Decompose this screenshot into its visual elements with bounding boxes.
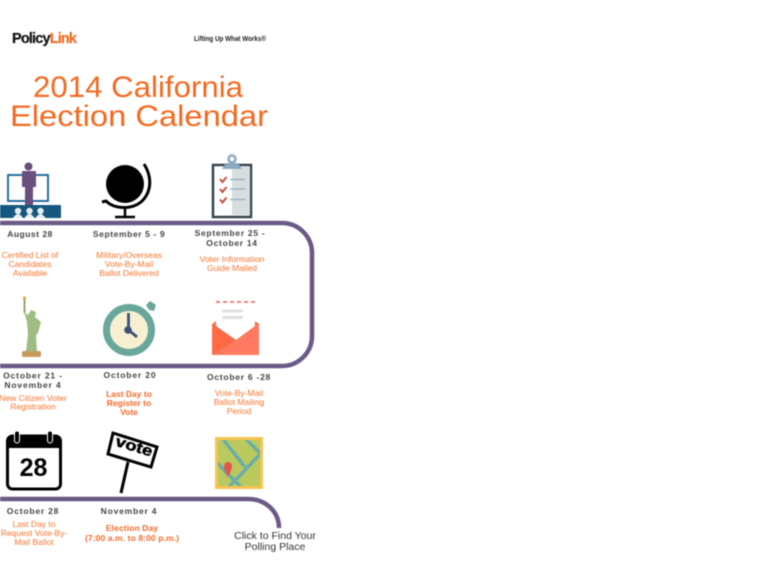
icon: vote sign bbox=[108, 433, 157, 493]
description: certified list: Candidates bbox=[8, 259, 52, 269]
description: election day: (7:00 a.m. to 8:00 p.m.) bbox=[85, 533, 179, 543]
tagline: Lifting Up What Works® bbox=[194, 35, 267, 43]
description: last day to request: Request Vote-By- bbox=[1, 528, 67, 538]
title: Election Calendar bbox=[10, 100, 268, 133]
description: ballot mailing bbox=[214, 388, 265, 416]
icon: clipboard bbox=[213, 156, 251, 217]
timeline path: lower segment bbox=[0, 499, 279, 528]
description: military overseas: Vote-By-Mail bbox=[105, 259, 153, 269]
description: new citizen: New Citizen Voter bbox=[0, 393, 67, 403]
icon: vote sign: vote bbox=[113, 433, 155, 460]
description: new citizen bbox=[0, 393, 67, 412]
date: October 21 - November 4: October 21 - bbox=[3, 370, 63, 380]
link: find your polling place: Polling Place bbox=[245, 541, 306, 553]
description: ballot mailing: Vote-By-Mail bbox=[215, 388, 263, 398]
icon: globe bbox=[102, 164, 150, 217]
description: last day to register bbox=[106, 389, 152, 417]
icon: candidates list bbox=[0, 162, 61, 218]
logo: PolicyLink: PolicyLink bbox=[12, 31, 78, 47]
description: last day to register: Last Day to bbox=[106, 389, 152, 399]
title: 2014 California bbox=[33, 71, 244, 104]
link: find your polling place: Click to Find Your bbox=[234, 530, 316, 542]
description: certified list: Available bbox=[13, 268, 47, 278]
date: September 25 - October 14: September 25 - bbox=[195, 228, 265, 238]
date: October 21 - November 4 bbox=[3, 370, 63, 390]
description: new citizen: Registration bbox=[10, 402, 56, 412]
description: ballot mailing: Ballot Mailing bbox=[214, 397, 265, 407]
description: voter guide: Guide Mailed bbox=[207, 263, 257, 273]
date: September 25 - October 14 bbox=[195, 228, 265, 248]
icon: stopwatch bbox=[106, 301, 156, 352]
description: last day to request bbox=[1, 519, 67, 547]
description: last day to request: Last Day to bbox=[12, 519, 56, 529]
date: September 25 - October 14: October 14 bbox=[206, 238, 258, 248]
date: October 6 -28: October 6 -28 bbox=[207, 372, 271, 382]
date: August 28: August 28 bbox=[7, 229, 53, 239]
description: election day bbox=[85, 523, 179, 543]
date: October 21 - November 4: November 4 bbox=[4, 380, 62, 390]
date: October 28: October 28 bbox=[7, 506, 59, 516]
description: military overseas: Ballot Delivered bbox=[99, 268, 159, 278]
description: last day to register: Register to bbox=[107, 398, 151, 408]
icon: map bbox=[216, 438, 264, 488]
description: last day to request: Mail Ballot bbox=[14, 537, 54, 547]
date: October 20: October 20 bbox=[104, 370, 156, 380]
description: military overseas bbox=[96, 250, 162, 278]
description: military overseas: Military/Overseas bbox=[96, 250, 162, 260]
description: voter guide: Voter Information bbox=[200, 254, 265, 264]
icon: calendar 28: 28 bbox=[20, 454, 47, 482]
description: ballot mailing: Period bbox=[227, 406, 252, 416]
date: September 5 - 9: September 5 - 9 bbox=[93, 229, 165, 239]
link: find your polling place bbox=[234, 530, 316, 553]
icon: statue of liberty bbox=[22, 296, 41, 357]
icon: envelope bbox=[212, 302, 259, 355]
date: November 4: November 4 bbox=[101, 506, 157, 516]
timeline path: upper loop bbox=[0, 223, 312, 366]
icon: calendar 28 bbox=[7, 431, 61, 489]
title bbox=[10, 71, 268, 133]
description: certified list: Certified List of bbox=[2, 250, 59, 260]
description: last day to register: Vote bbox=[120, 407, 138, 417]
description: certified list bbox=[2, 250, 59, 278]
description: voter guide bbox=[200, 254, 265, 273]
description: election day: Election Day bbox=[106, 523, 158, 533]
